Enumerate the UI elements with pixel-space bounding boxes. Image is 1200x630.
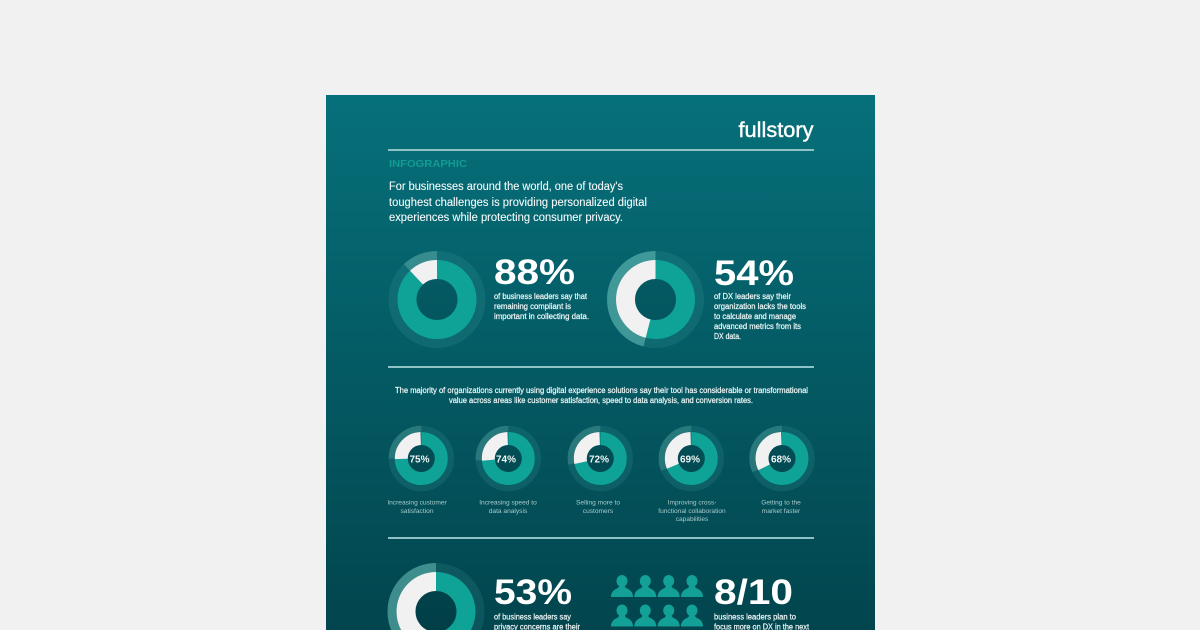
stat: 54%: to calculate and manage	[714, 312, 797, 321]
text block: digital experience summary	[395, 386, 808, 405]
caption: getting to market faster: market faster	[762, 508, 801, 515]
stat: 88%: of business leaders say that	[494, 292, 588, 301]
logo: fullstory: fullstory	[738, 119, 814, 142]
caption: increasing customer satisfaction	[387, 500, 447, 515]
caption: selling more to customers	[576, 500, 620, 515]
caption: increasing speed to data analysis	[479, 500, 537, 515]
donut chart: 54%	[612, 256, 700, 344]
icon group: 8 of 10 people	[611, 575, 703, 626]
stat: 8 of 10	[714, 573, 810, 630]
heading: intro text: toughest challenges is providing personalized digital	[389, 197, 647, 209]
stat: 8 of 10: business leaders plan to	[714, 612, 797, 622]
caption: increasing speed to data analysis: data analysis	[489, 508, 528, 515]
donut chart: 72% selling more	[571, 429, 630, 488]
stat: 54%: 54%	[714, 254, 794, 293]
donut chart: 53%	[392, 568, 480, 630]
caption: improving collaboration	[658, 500, 726, 523]
panel: infographic background	[326, 95, 875, 630]
caption: improving collaboration: Improving cross-	[668, 500, 716, 506]
caption: increasing customer satisfaction: Increasing customer	[387, 500, 447, 506]
donut chart: 68% market faster	[752, 429, 812, 488]
stat: 8 of 10: 8/10	[714, 573, 793, 612]
donut chart: 75% customer satisfaction: 75%	[409, 454, 430, 466]
donut chart: 69% cross-functional collaboration	[662, 429, 721, 488]
text block: digital experience summary: value across areas like customer satisfaction, speed to data analysis, and conversion rates.	[449, 396, 753, 405]
donut chart: 72% selling more: 72%	[589, 454, 609, 466]
caption: increasing speed to data analysis: Increasing speed to	[479, 500, 537, 506]
heading: intro text	[389, 181, 647, 224]
donut chart: 69% cross-functional collaboration: 69%	[680, 454, 700, 466]
caption: improving collaboration: capabilities	[676, 516, 709, 523]
stat: 53%: 53%	[494, 573, 572, 612]
caption: improving collaboration: functional collaboration	[658, 508, 726, 515]
stat: 54%: advanced metrics from its	[714, 322, 801, 331]
caption: selling more to customers: customers	[583, 508, 614, 515]
text block: digital experience summary: The majority of organizations currently using digital experience solutions say their tool has considerable or transformational	[395, 386, 808, 395]
donut chart: 75% customer satisfaction	[392, 429, 451, 488]
donut chart: 88%	[393, 256, 481, 344]
stat: 88%: important in collecting data.	[494, 312, 589, 321]
stat: 53%	[494, 573, 580, 630]
caption: selling more to customers: Selling more to	[576, 500, 620, 506]
stat: 88%: 88%	[494, 253, 575, 292]
heading: intro text: experiences while protecting consumer privacy.	[389, 212, 623, 224]
label: infographic eyebrow: INFOGRAPHIC	[389, 158, 467, 170]
stat: 54%: of DX leaders say their	[714, 292, 791, 301]
heading: intro text: For businesses around the world, one of today's	[389, 181, 623, 193]
stat: 54%: DX data.	[714, 332, 741, 341]
caption: getting to market faster	[761, 500, 801, 515]
caption: increasing customer satisfaction: satisfaction	[400, 508, 434, 515]
caption: getting to market faster: Getting to the	[761, 500, 801, 506]
stat: 88%: remaining compliant is	[494, 302, 571, 311]
stat: 53%: of business leaders say	[494, 612, 571, 622]
stat: 54%: organization lacks the tools	[714, 302, 806, 311]
stat: 88%	[494, 253, 589, 321]
donut chart: 74% speed to data analysis	[479, 429, 538, 488]
donut chart: 74% speed to data analysis: 74%	[496, 454, 516, 466]
stat: 54%	[714, 254, 806, 341]
donut chart: 68% market faster: 68%	[771, 454, 791, 466]
